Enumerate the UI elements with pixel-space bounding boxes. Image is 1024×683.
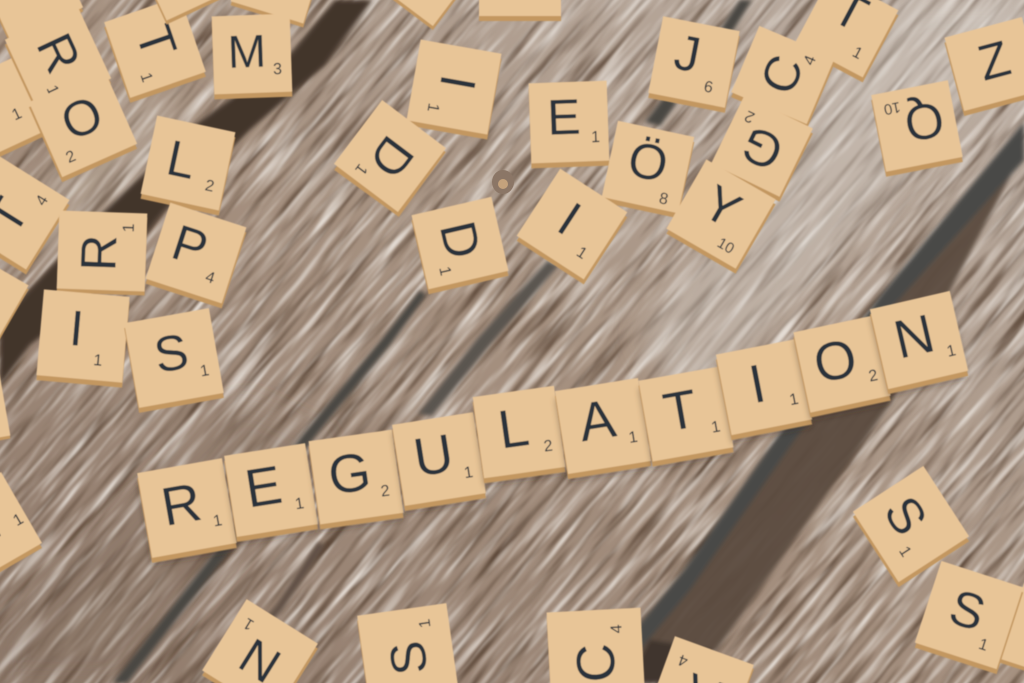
tile: G <box>309 430 403 532</box>
tile: R sideways: 1 <box>121 223 138 233</box>
tile: A bottom: 4 <box>676 650 690 669</box>
tile: left edge sliver 1 <box>0 245 29 359</box>
tile: S <box>124 308 224 413</box>
tile: Q upside down: 10 <box>882 98 902 118</box>
tile: Z: Z <box>972 30 1016 92</box>
tile: T: T <box>659 379 702 443</box>
tile: T rotated <box>104 0 206 103</box>
tile: top middle partial 2 <box>479 0 561 21</box>
tile: O: 2 <box>63 148 79 167</box>
tile: L: L <box>162 129 201 190</box>
tile: L <box>141 116 235 215</box>
tile: I tilted: 1 <box>573 244 590 263</box>
tile: S bottom <box>357 603 459 683</box>
tile: S lower right <box>915 561 1023 674</box>
tile: T rotated: T <box>125 18 188 65</box>
tile: Y <box>666 159 776 274</box>
tile: C rotated: 4 <box>801 53 820 68</box>
tile: G upside down <box>711 95 813 202</box>
tile: P: P <box>165 214 214 278</box>
tile: I tilted: I <box>548 191 591 246</box>
tile: M: 3 <box>273 61 282 78</box>
tile: left edge 1 <box>0 57 48 168</box>
tile: S bottom: 1 <box>416 618 434 629</box>
tile: S tilted <box>853 466 969 587</box>
tile: T top right: 1 <box>849 44 865 63</box>
tile: top middle partial 1 <box>369 0 481 30</box>
tile: R <box>137 458 237 566</box>
tile: Y: 10 <box>714 235 737 258</box>
tile: top partial 2 <box>231 0 325 27</box>
tile: O <box>29 69 137 182</box>
tile: D rotated: 1 <box>351 160 370 178</box>
tile: I lower: 1 <box>93 352 103 370</box>
tile: A: 1 <box>628 429 639 447</box>
tile: O: O <box>809 328 862 395</box>
tile: S lower right: 1 <box>976 636 990 655</box>
tile: R rotated: 1 <box>43 83 62 98</box>
tile: C rotated: C <box>749 47 815 102</box>
tile: G: 2 <box>380 483 391 501</box>
tile: Q upside down <box>871 80 963 177</box>
tile: U: U <box>409 423 457 489</box>
tile: S bottom: S <box>379 638 439 678</box>
tile: left edge sliver 2 <box>0 357 10 452</box>
tile: O: O <box>53 85 111 152</box>
tile: O umlaut: 8 <box>657 190 670 209</box>
tile: top-left partial <box>0 0 83 45</box>
tile: D sideways: 1 <box>435 265 454 278</box>
tile: T <box>639 367 733 469</box>
tile: N: N <box>888 303 940 371</box>
tile: I: 1 <box>788 391 800 409</box>
tile: E upper: 1 <box>591 129 600 146</box>
tile: T partial left <box>0 157 69 274</box>
tile: L: 2 <box>543 438 554 456</box>
tile: M <box>212 14 292 99</box>
tile: U <box>392 412 486 514</box>
tile: R rotated: R <box>26 25 92 81</box>
tile: S tilted: 1 <box>895 544 914 560</box>
tile: R: R <box>157 472 206 538</box>
tile: J <box>648 16 740 113</box>
tile: I sideways: 1 <box>423 102 442 114</box>
tile: Z <box>945 17 1024 116</box>
wood knot <box>492 170 514 194</box>
tile: N <box>870 291 968 397</box>
tile: R rotated <box>5 6 111 117</box>
tile: E <box>224 443 318 545</box>
tile: G: G <box>325 441 374 507</box>
tile: I sideways <box>407 40 501 139</box>
tile: L: 2 <box>203 177 216 196</box>
tile: T partial left: 4 <box>33 192 52 209</box>
tile: D sideways: D <box>429 216 492 264</box>
tile: I: I <box>744 353 770 415</box>
tile: R: 1 <box>212 512 224 531</box>
tile: C bottom: C <box>565 642 627 683</box>
tile: I <box>716 339 812 443</box>
tile: O umlaut <box>602 121 694 218</box>
tile: L: L <box>494 397 533 461</box>
tile: O <box>793 315 891 421</box>
tile: S lower right: S <box>943 578 992 642</box>
tile: M: M <box>227 25 267 78</box>
tile: D rotated <box>334 100 446 217</box>
tile: A bottom <box>646 636 754 683</box>
tile: C bottom: 4 <box>608 624 626 634</box>
tile: T top right <box>796 0 901 82</box>
tile: T rotated: 1 <box>136 71 155 85</box>
tile: C rotated <box>731 26 835 129</box>
tile: E: 1 <box>294 495 305 513</box>
tile: J: J <box>670 24 705 83</box>
tile: I lower: I <box>67 300 86 357</box>
tile: D sideways <box>412 197 508 294</box>
tile: left edge lower: 1 <box>10 511 27 530</box>
tile: I sideways: I <box>429 71 487 94</box>
tile: top partial 1 <box>135 0 235 24</box>
tile: Y: Y <box>693 174 750 239</box>
tile: R sideways <box>57 210 147 296</box>
tile: E upper: E <box>546 89 581 146</box>
tile: P: 4 <box>203 269 217 288</box>
tile: S: S <box>150 323 192 384</box>
tile: E upper <box>529 81 609 168</box>
tile: right edge partial <box>1000 583 1024 683</box>
tile: N bottom <box>202 599 318 683</box>
tile: O: 2 <box>867 367 879 386</box>
tile: left edge 1: 1 <box>9 105 25 124</box>
tile: L <box>473 386 565 486</box>
tile: N: 1 <box>945 342 958 361</box>
tile: R sideways: R <box>70 234 128 272</box>
tile: G upside down: G <box>732 115 792 182</box>
tile: U: 1 <box>463 464 474 482</box>
tile: G upside down: 2 <box>742 107 758 126</box>
tile: P <box>146 203 246 308</box>
tile: A <box>555 378 651 482</box>
tile: C bottom <box>547 608 645 683</box>
tile: E: E <box>241 455 286 520</box>
tile: N bottom: 1 <box>241 614 257 633</box>
tile: O umlaut: Ö <box>623 130 673 193</box>
tile: S tilted: S <box>873 486 938 545</box>
tile: S: 1 <box>199 362 211 381</box>
tile: left edge lower <box>0 472 42 589</box>
tile: D rotated: D <box>358 126 425 188</box>
tile: A: A <box>575 388 620 453</box>
tile: I lower <box>36 289 130 388</box>
tile: T: 1 <box>710 418 722 437</box>
tile: J: 6 <box>702 79 714 97</box>
word: REGULATION <box>137 291 968 566</box>
tile: I tilted <box>517 169 627 284</box>
tile: Q upside down: Q <box>900 90 949 153</box>
